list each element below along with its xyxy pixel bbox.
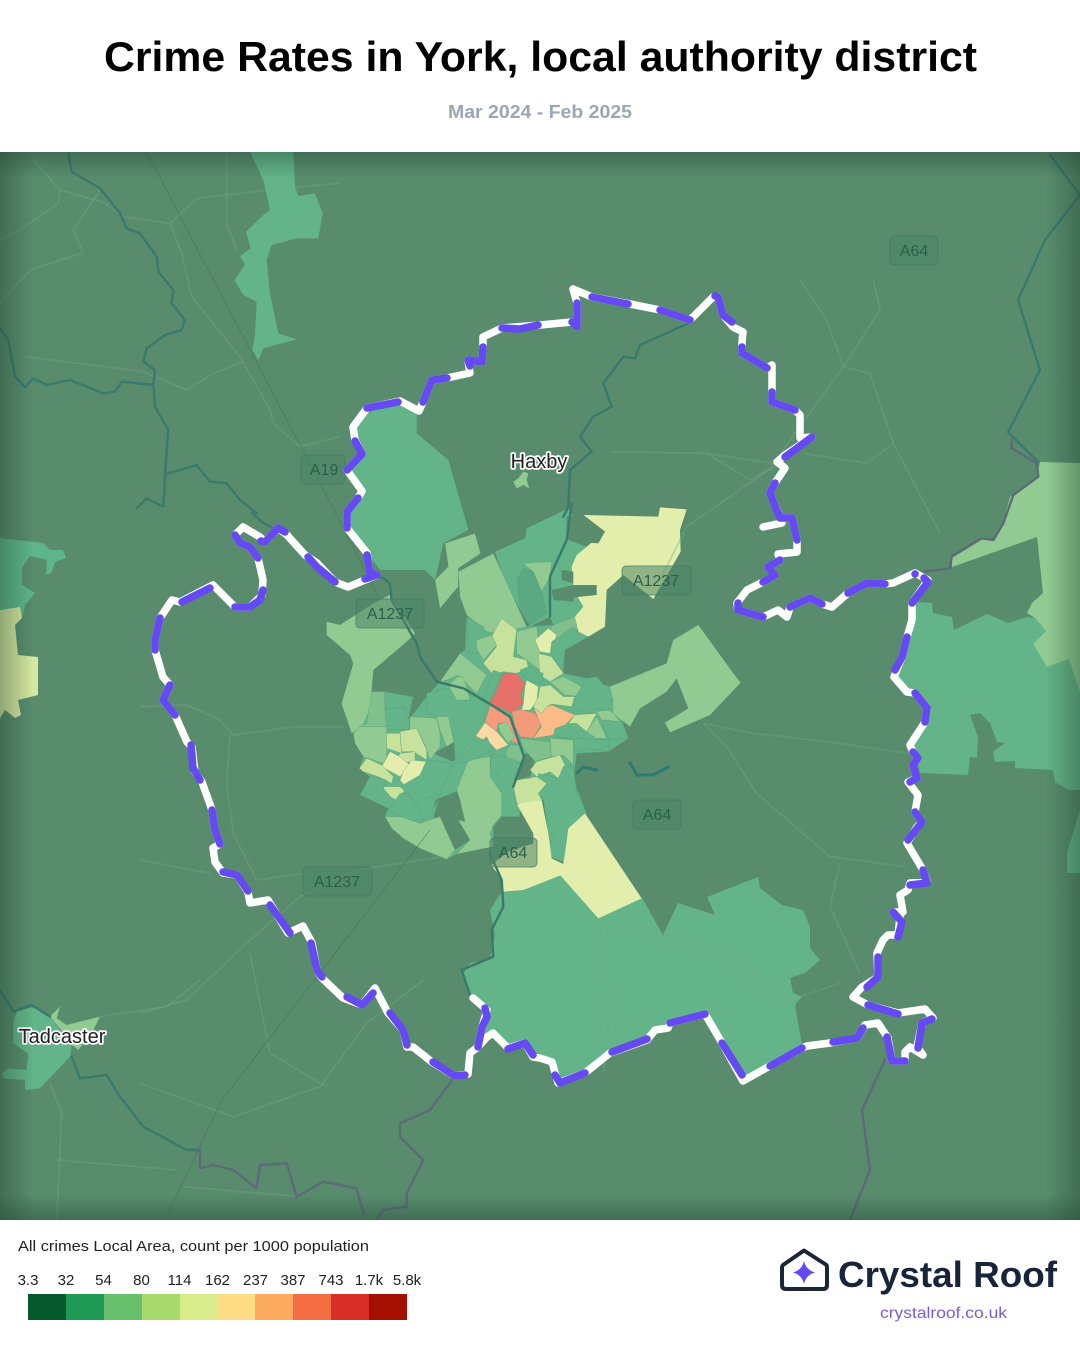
label: A64 east xyxy=(633,800,681,829)
map base xyxy=(0,152,1080,1220)
ward group: Poppleton and Acomb xyxy=(327,595,415,733)
label: A1237 north-east: A1237 xyxy=(633,573,679,590)
logo url: crystalroof.co.uk xyxy=(880,1305,1008,1322)
legend scale labels: 162 xyxy=(205,1272,230,1289)
ward: pale orange east xyxy=(533,705,575,738)
legend scale labels: 80 xyxy=(133,1272,150,1289)
legend scale labels: 3.3 xyxy=(18,1272,38,1289)
area: south large xyxy=(462,875,820,1083)
label: A1237 west: A1237 xyxy=(367,606,413,623)
ward group: north xyxy=(495,508,587,627)
district boundary xyxy=(155,289,933,1083)
lakes xyxy=(577,763,668,775)
area: north-west Rawcliffe xyxy=(343,401,529,580)
boundary: white line xyxy=(155,289,933,1083)
area: east light green xyxy=(952,462,1080,693)
ward group: south-east xyxy=(520,738,552,762)
label: A64 east: A64 xyxy=(643,807,671,824)
central York wards choropleth xyxy=(327,507,741,918)
ward: pale yellow south xyxy=(491,800,563,892)
unshaded pockets inside the city xyxy=(433,737,535,850)
label: A19 xyxy=(301,455,345,484)
panel: choropleth map xyxy=(0,152,1080,1220)
legend scale labels: 54 xyxy=(95,1272,112,1289)
place label: Tadcaster: Tadcaster xyxy=(19,1026,106,1048)
legend scale labels: 743 xyxy=(318,1272,344,1289)
label: A1237 south: A1237 xyxy=(314,874,360,891)
place label: Haxby: Haxby xyxy=(511,451,567,473)
legend scale labels: 237 xyxy=(243,1272,268,1289)
ward: big pale yellow north-east xyxy=(572,507,687,637)
legend scale labels: 1.7k xyxy=(355,1272,384,1289)
outer districts choropleth xyxy=(0,152,1080,1090)
icon: house with star xyxy=(782,1250,827,1289)
legend xyxy=(18,1238,422,1320)
ward: pale yellow centre xyxy=(522,680,538,710)
wards underlay xyxy=(353,617,628,863)
label: A64 north-east: A64 xyxy=(900,243,928,260)
label: A64 north-east xyxy=(890,236,938,265)
area: west teal xyxy=(0,538,66,618)
logo: Crystal Roof xyxy=(782,1250,1058,1322)
area: west yellow xyxy=(0,607,38,718)
logo wordmark: Crystal Roof xyxy=(838,1254,1058,1295)
ward: river island xyxy=(498,722,515,743)
map edge vignette xyxy=(0,152,1080,1220)
boundary: white spur xyxy=(473,998,487,1047)
area: far east corner xyxy=(1067,810,1080,873)
legend scale labels: 387 xyxy=(280,1272,306,1289)
label: A19: A19 xyxy=(310,462,338,479)
boundary: purple dashes xyxy=(155,296,932,1083)
title: Crime Rates in York, local authority district xyxy=(104,33,977,80)
subtitle: date range: Mar 2024 - Feb 2025 xyxy=(448,102,632,122)
area: Haxby xyxy=(513,472,529,488)
road labels xyxy=(301,236,938,896)
roads xyxy=(0,153,960,1220)
railway lines xyxy=(147,153,430,1220)
ward: pale yellow south-east xyxy=(560,813,642,918)
label: A1237 south xyxy=(303,867,372,896)
ward group: east xyxy=(533,685,575,713)
area: east mid green xyxy=(894,602,1080,790)
legend scale labels xyxy=(18,1272,422,1289)
legend colour bar xyxy=(28,1294,407,1320)
ward group: city centre xyxy=(440,653,487,693)
legend scale labels: 114 xyxy=(168,1272,191,1289)
ward: red centre xyxy=(489,673,525,713)
area: north-west strip xyxy=(234,152,323,360)
rivers xyxy=(0,153,1080,1220)
label: A64 south xyxy=(490,838,537,867)
ward group: inner north xyxy=(483,618,528,675)
ward: Guildhall orange-red xyxy=(512,709,542,738)
label: A64 south: A64 xyxy=(499,845,527,862)
label: A1237 north-east xyxy=(622,566,691,595)
legend scale labels: 32 xyxy=(58,1272,74,1289)
ward: pale orange west xyxy=(476,722,508,750)
label: A1237 west xyxy=(356,599,424,628)
area: Tadcaster xyxy=(2,1007,100,1090)
ward group: south-west xyxy=(488,753,523,817)
ward: Micklegate orange-red xyxy=(485,706,520,744)
legend title: All crimes Local Area, count per 1000 population xyxy=(18,1238,369,1255)
legend scale labels: 5.8k xyxy=(393,1272,422,1289)
unshaded pockets north xyxy=(567,515,605,543)
